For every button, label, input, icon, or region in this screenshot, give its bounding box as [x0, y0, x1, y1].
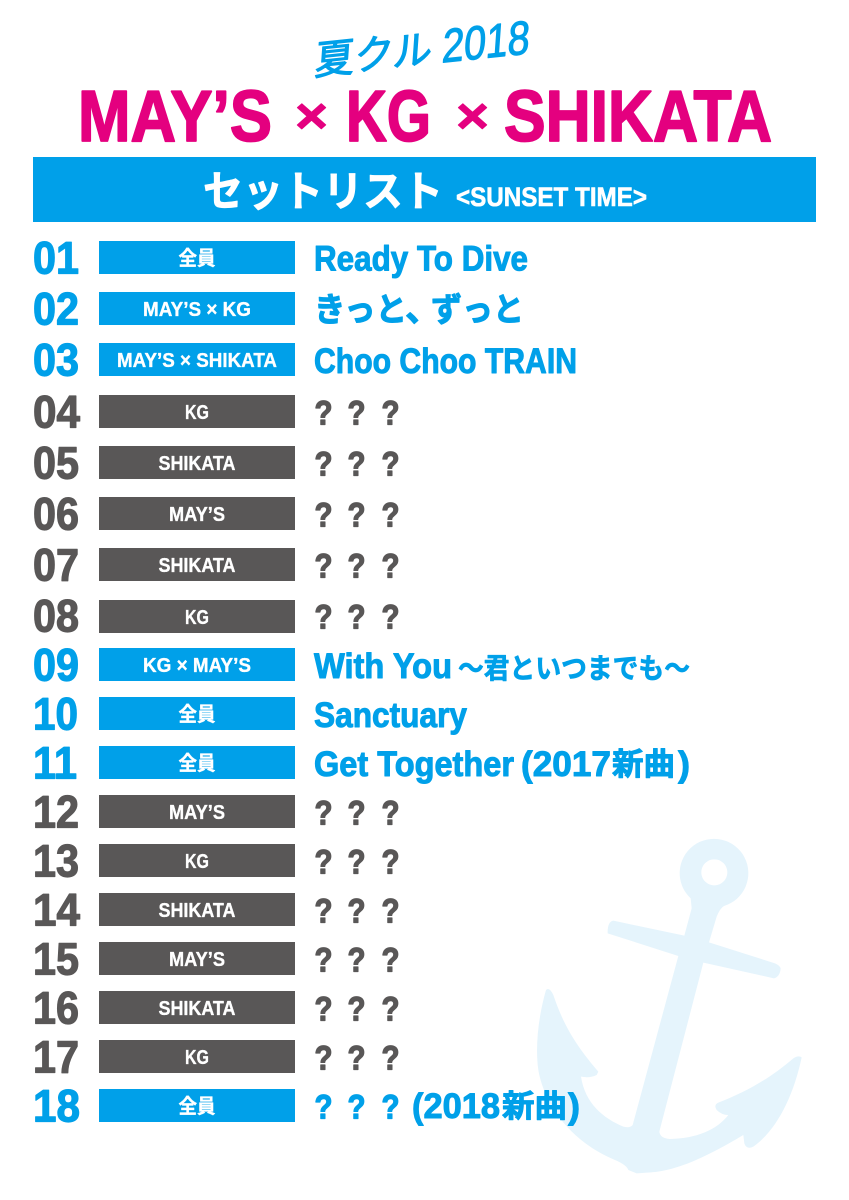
row 11: Get Together [314, 745, 514, 784]
row 18: ) [568, 1087, 580, 1126]
row 15: ? [382, 942, 400, 980]
row 11: 11 [33, 738, 77, 788]
row 05: ? [348, 446, 366, 484]
row 06: ? [314, 496, 332, 534]
banner: setlist heading: <SUNSET TIME> [456, 182, 647, 212]
row 08: KG [185, 607, 209, 629]
row 03 [33, 334, 577, 386]
row 12: ? [314, 794, 332, 832]
row 04: ? [348, 394, 366, 432]
row 13: ? [314, 844, 332, 882]
row 16: 16 [33, 982, 79, 1034]
row 07: ? [348, 548, 366, 586]
banner: setlist heading: セットリスト [203, 168, 443, 215]
row 04: 04 [33, 386, 80, 438]
row 07: ? [382, 548, 400, 586]
row 12: ? [348, 794, 366, 832]
row 11: ) [678, 745, 690, 784]
row 03: 03 [33, 334, 79, 386]
row 06: 06 [33, 488, 79, 540]
heading: performers: MAY’S [78, 77, 272, 157]
row 02: MAY’S × KG [143, 299, 251, 321]
row 12: MAY’S [169, 802, 225, 824]
heading: performers: SHIKATA [504, 77, 772, 157]
row 17: KG [185, 1047, 209, 1069]
row 04 [33, 386, 400, 438]
row 14: ? [382, 892, 400, 930]
row 18: ? [314, 1088, 332, 1126]
row 14: ? [314, 892, 332, 930]
row 12: ? [382, 794, 400, 832]
row 17 [33, 1032, 400, 1082]
row 13: ? [348, 844, 366, 882]
row 02: 02 [33, 284, 79, 334]
row 14 [33, 884, 400, 936]
row 14: ? [348, 892, 366, 930]
row 15: ? [314, 942, 332, 980]
row 09 [33, 640, 690, 690]
heading: performers [78, 77, 772, 157]
row 11: 新曲 [612, 747, 675, 782]
row 01 [33, 232, 528, 284]
row 18: 新曲 [502, 1089, 567, 1124]
row 13: ? [382, 844, 400, 882]
row 18: (2018 [412, 1087, 500, 1126]
row 09: KG × MAY’S [143, 655, 251, 677]
row 16: ? [348, 990, 366, 1028]
banner: setlist heading [33, 157, 816, 222]
row 17: ? [314, 1040, 332, 1078]
row 07: ? [314, 548, 332, 586]
row 16: ? [314, 990, 332, 1028]
row 10: Sanctuary [314, 696, 467, 735]
row 02: 、 [405, 288, 441, 329]
row 07: 07 [33, 540, 79, 590]
row 09: With You [314, 647, 452, 686]
heading: performers: × [456, 88, 489, 144]
row 08 [33, 590, 400, 642]
row 16: SHIKATA [158, 998, 236, 1020]
row 01: 01 [33, 232, 79, 284]
row 18 [33, 1080, 580, 1132]
row 04: ? [382, 394, 400, 432]
row 05: ? [314, 446, 332, 484]
row 02 [33, 284, 524, 334]
row 16 [33, 982, 400, 1034]
row 11: (2017 [521, 745, 611, 784]
row 14: SHIKATA [158, 900, 236, 922]
row 03: MAY’S × SHIKATA [117, 350, 277, 372]
row 18: 全員 [178, 1095, 216, 1118]
row 08: 08 [33, 590, 79, 642]
row 06: ? [382, 496, 400, 534]
row 15: ? [348, 942, 366, 980]
row 04: KG [185, 402, 209, 424]
icon: anchor watermark [537, 839, 802, 1173]
row 13: KG [185, 851, 209, 873]
row 09: ～君といつまでも～ [458, 653, 690, 684]
row 15: 15 [33, 934, 79, 984]
event title: 夏クル 2018: 夏クル [313, 26, 434, 84]
row 05: ? [382, 446, 400, 484]
row 02: きっと [314, 291, 407, 328]
row 05: 05 [33, 438, 79, 488]
event title: 夏クル 2018 [313, 11, 532, 87]
row 08: ? [314, 598, 332, 636]
row 11: 全員 [178, 752, 216, 775]
row 18: ? [382, 1088, 400, 1126]
row 10: 10 [33, 688, 78, 740]
row 08: ? [382, 598, 400, 636]
row 02: ずっと [431, 291, 524, 328]
row 14: 14 [33, 884, 80, 936]
row 05 [33, 438, 400, 488]
row 06: MAY’S [169, 504, 225, 526]
row 10 [33, 688, 467, 740]
row 07: SHIKATA [158, 555, 236, 577]
row 06: ? [348, 496, 366, 534]
row 13: 13 [33, 836, 79, 886]
row 15 [33, 934, 400, 984]
row 11 [33, 738, 690, 788]
row 17: ? [348, 1040, 366, 1078]
row 13 [33, 836, 400, 886]
event title: 夏クル 2018: 2018 [440, 11, 532, 74]
row 01: Ready To Dive [314, 240, 528, 278]
row 18: 18 [33, 1080, 80, 1132]
row 12 [33, 786, 400, 838]
row 08: ? [348, 598, 366, 636]
row 18: ? [348, 1088, 366, 1126]
row 07 [33, 540, 400, 590]
heading: performers: × [295, 88, 328, 144]
row 03: Choo Choo TRAIN [314, 342, 577, 381]
row 04: ? [314, 394, 332, 432]
row 05: SHIKATA [158, 453, 236, 475]
row 01: 全員 [178, 247, 216, 270]
row 15: MAY’S [169, 949, 225, 971]
row 12: 12 [33, 786, 79, 838]
row 09: 09 [33, 640, 79, 690]
row 17: ? [382, 1040, 400, 1078]
row 17: 17 [33, 1032, 79, 1082]
row 16: ? [382, 990, 400, 1028]
row 06 [33, 488, 400, 540]
row 10: 全員 [178, 703, 216, 726]
heading: performers: KG [346, 77, 431, 157]
